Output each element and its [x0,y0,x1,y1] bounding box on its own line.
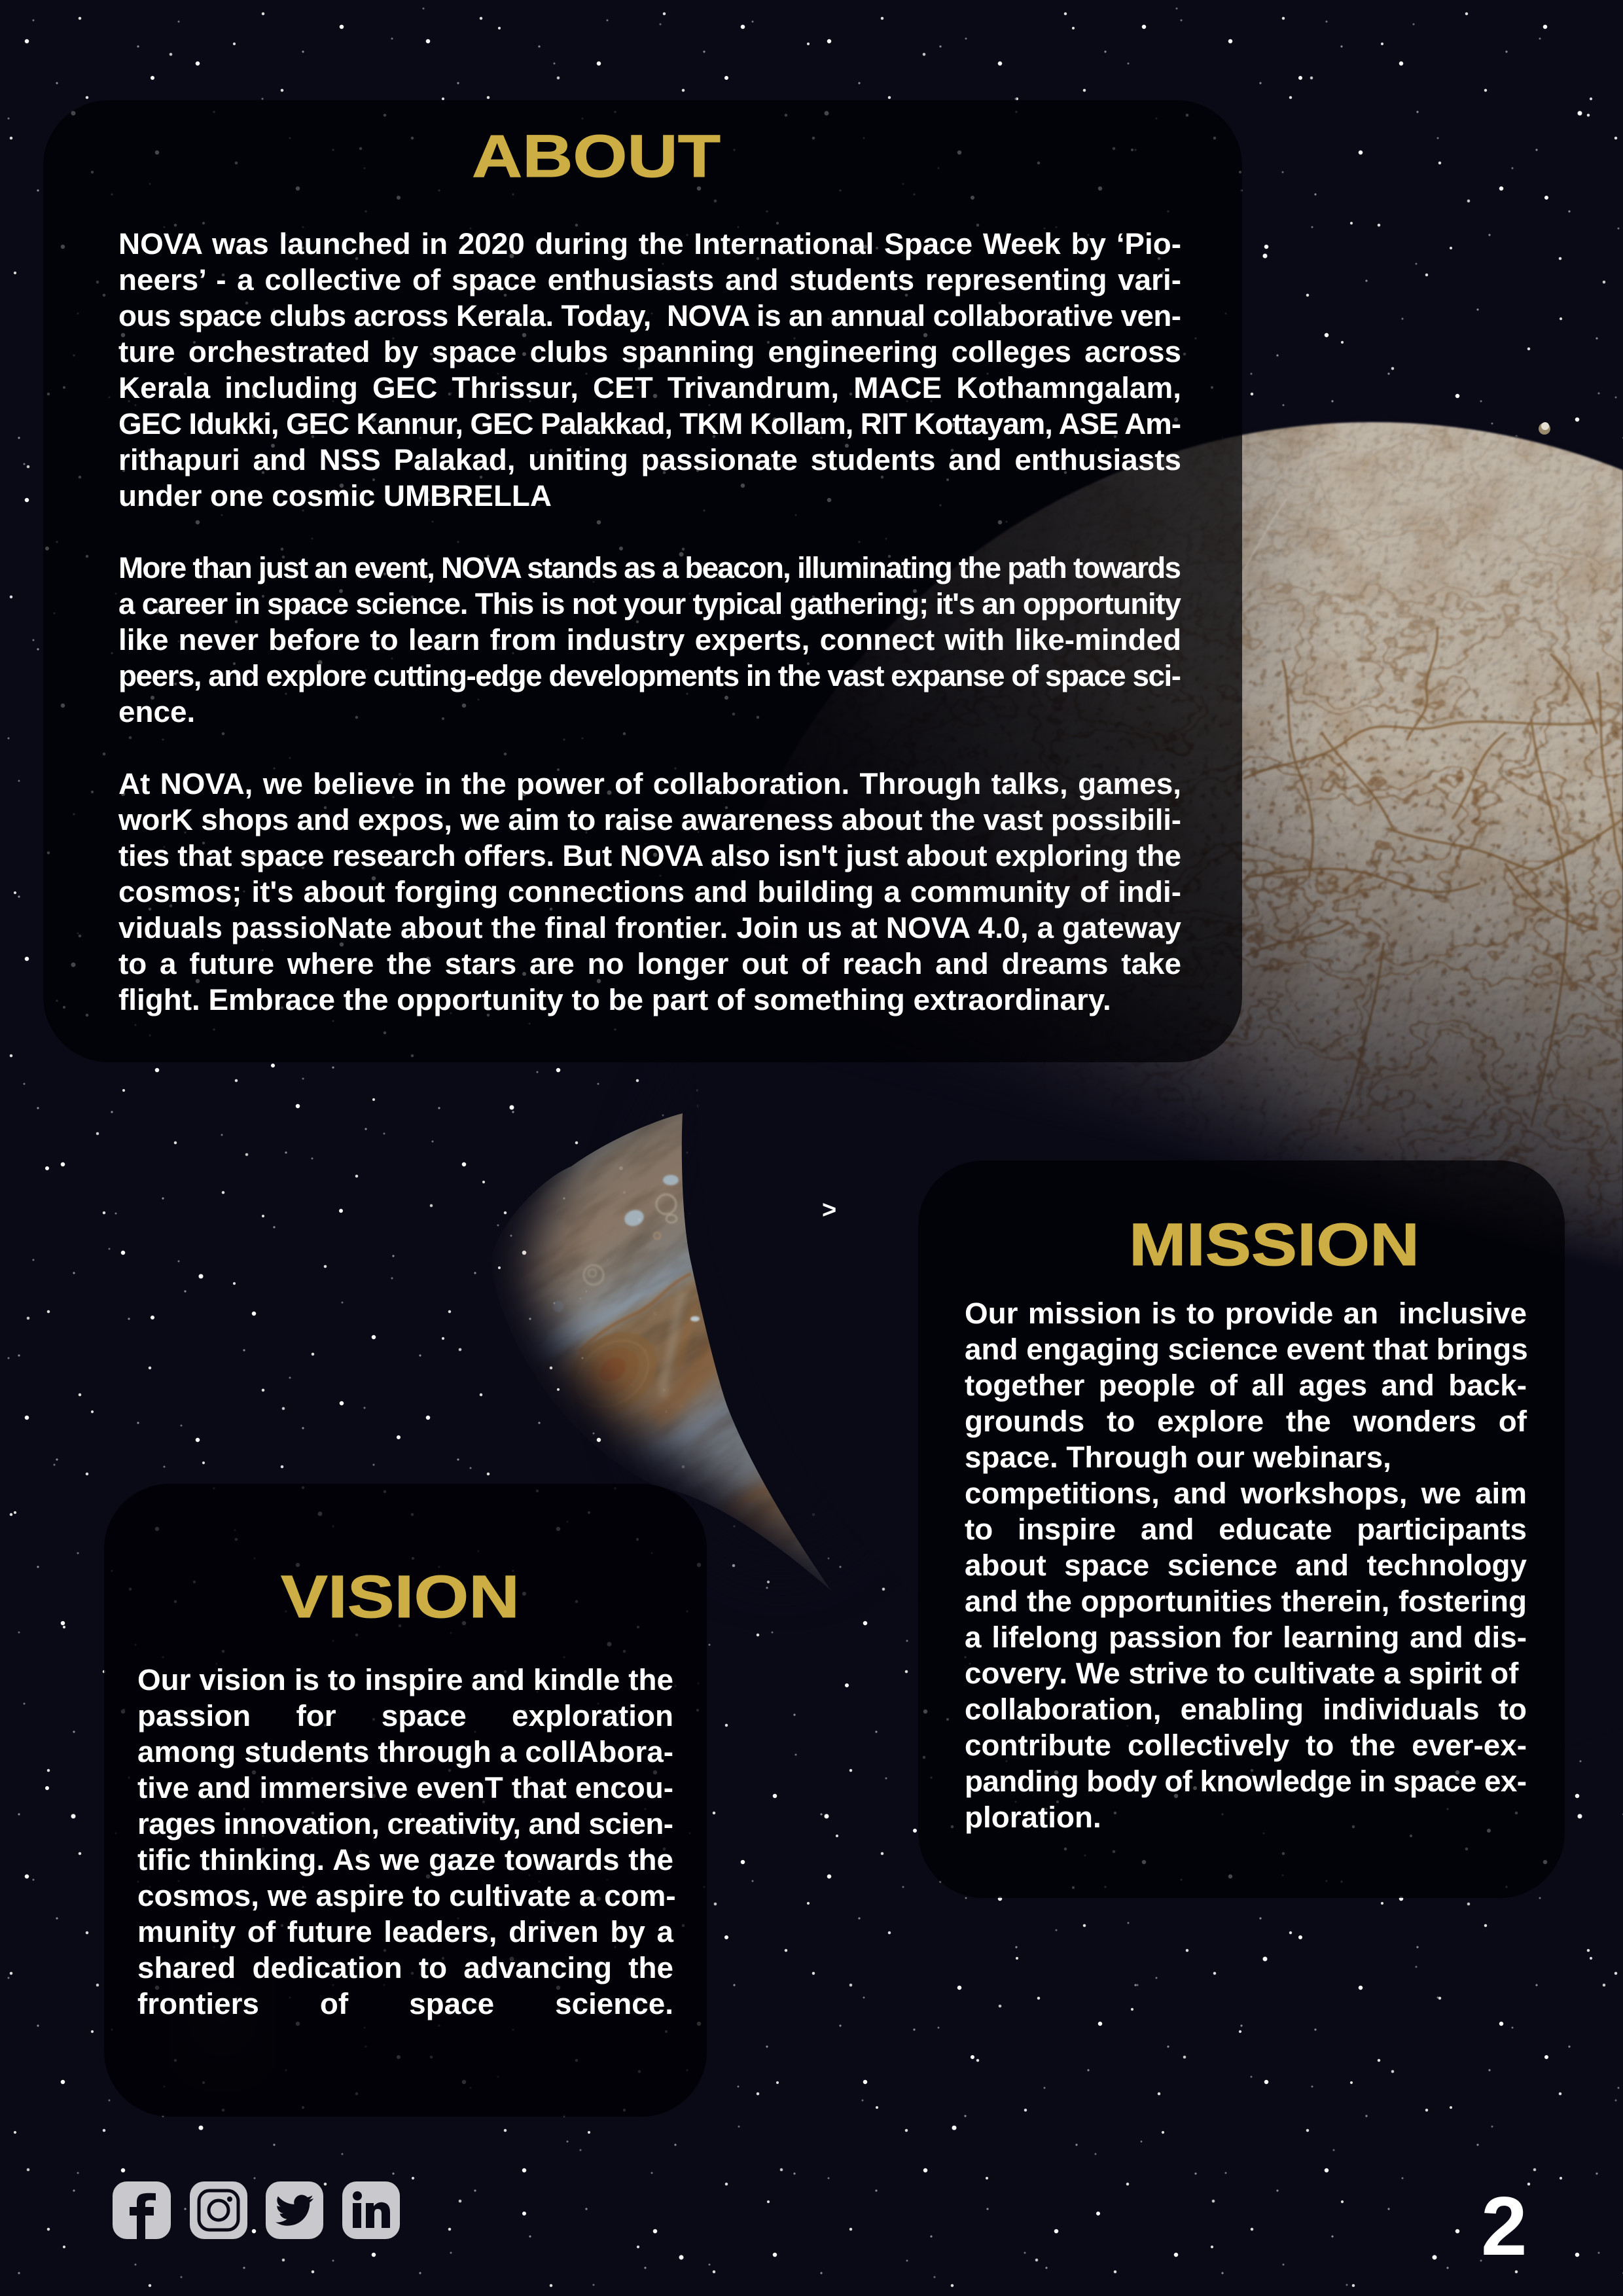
text block: about paragraphs: viduals passioNate about the final frontier. Join us at NOVA 4.0, a gateway [118,911,1182,944]
text block: vision statement: cosmos, we aspire to cultivate a com- [137,1879,676,1912]
text block: about paragraphs: like never before to learn from industry experts, connect with like-minded [118,623,1181,656]
text block: about paragraphs: neers’ - a collective of space enthusiasts and students representing vari- [118,263,1181,296]
text block: about paragraphs: cosmos; it's about forging connections and building a community of indi- [118,875,1181,908]
social icons row [113,2181,400,2239]
icon: instagram [190,2181,247,2239]
text block: vision statement: munity of future leaders, driven by a [137,1915,673,1948]
band boundary [579,1274,691,1352]
text block: about paragraphs: ties that space research offers. But NOVA also isn't just about exploring the [118,839,1181,872]
text block: about paragraphs: NOVA was launched in 2020 during the International Space Week by ‘Pio- [118,227,1181,260]
text block: mission statement: covery. We strive to cultivate a spirit of [965,1657,1518,1690]
text block: about paragraphs: flight. Embrace the opportunity to be part of something extraordinary. [118,983,1111,1016]
page number: 2 [1481,2179,1527,2272]
text block: mission statement: about space science and technology [965,1549,1527,1582]
text block: vision statement: among students through a collAbora- [137,1735,673,1768]
text block: mission statement: grounds to explore the wonders of [965,1405,1527,1438]
text block: about paragraphs [118,227,1182,1016]
text block: about paragraphs: Kerala including GEC Thrissur, CET Trivandrum, MACE Kothamngalam, [118,371,1181,404]
text block: about paragraphs: under one cosmic UMBRELLA [118,479,552,512]
small moon on planet limb [1539,422,1550,435]
text block: about paragraphs: More than just an event, NOVA stands as a beacon, illuminating the path towards [118,551,1181,584]
text block: about paragraphs: a career in space science. This is not your typical gathering; it's an opportunity [118,587,1182,620]
text block: vision statement: passion for space exploration [137,1699,673,1732]
text block: vision statement: rages innovation, creativity, and scien- [137,1807,673,1840]
text block: about paragraphs: worK shops and expos, we aim to raise awareness about the vast possibili- [118,803,1181,836]
icon: twitter [266,2181,323,2239]
text block: about paragraphs: ture orchestrated by space clubs spanning engineering colleges across [118,335,1181,368]
text block: mission statement: collaboration, enabling individuals to [965,1693,1527,1726]
text block: mission statement: Our mission is to provide an inclusive [965,1297,1527,1330]
great red spot [577,1333,656,1405]
text block: vision statement: shared dedication to advancing the [137,1951,673,1984]
panel: vision [104,1484,707,2117]
text block: mission statement: competitions, and workshops, we aim [965,1477,1527,1510]
text block: about paragraphs: ous space clubs across Kerala. Today, NOVA is an annual collaborative ven- [118,299,1181,332]
white ovals [663,1175,679,1185]
text block: about paragraphs: to a future where the stars are no longer out of reach and dreams take [118,947,1181,980]
text block: about paragraphs: At NOVA, we believe in the power of collaboration. Through talks, games, [118,767,1181,800]
text block: about paragraphs: rithapuri and NSS Palakad, uniting passionate students and enthusiasts [118,443,1181,476]
text block: vision statement: tific thinking. As we gaze towards the [137,1843,673,1876]
icon: linkedin [342,2181,400,2239]
text block: mission statement: panding body of knowledge in space ex- [965,1765,1527,1798]
text block: mission statement: and the opportunities therein, fostering [965,1585,1527,1618]
text block: mission statement: space. Through our webinars, [965,1441,1391,1474]
panel: about [43,100,1242,1062]
text block: mission statement: to inspire and educate participants [965,1513,1527,1546]
text block: mission statement: contribute collectively to the ever-ex- [965,1729,1527,1762]
text block: mission statement: ploration. [965,1801,1101,1834]
text block: about paragraphs: ence. [118,695,195,728]
text block: vision statement: tive and immersive evenT that encou- [137,1771,673,1804]
heading: mission: MISSION [1129,1211,1419,1278]
panel: mission [918,1160,1565,1898]
text block: mission statement: together people of all ages and back- [965,1369,1527,1402]
text block: vision statement: Our vision is to inspire and kindle the [137,1663,673,1696]
heading: vision: VISION [281,1564,520,1630]
text block: about paragraphs: peers, and explore cutting-edge developments in the vast expanse of space sci- [118,659,1181,692]
stray chevron mark: > [822,1196,836,1224]
planet: jupiter crescent [503,1113,831,1590]
planet: cracked ice moon [694,419,1623,1780]
text block: vision statement [137,1663,676,2020]
text block: about paragraphs: GEC Idukki, GEC Kannur, GEC Palakkad, TKM Kollam, RIT Kottayam, ASE Am- [118,407,1181,440]
icon: facebook [113,2181,171,2239]
text block: mission statement [965,1297,1528,1834]
text block: mission statement: a lifelong passion for learning and dis- [965,1621,1527,1654]
text block: mission statement: and engaging science event that brings [965,1333,1528,1366]
starless shadow behind the jupiter crescent [635,1041,923,1564]
text block: vision statement: frontiers of space science. [137,1987,673,2020]
heading: about: ABOUT [472,123,721,190]
